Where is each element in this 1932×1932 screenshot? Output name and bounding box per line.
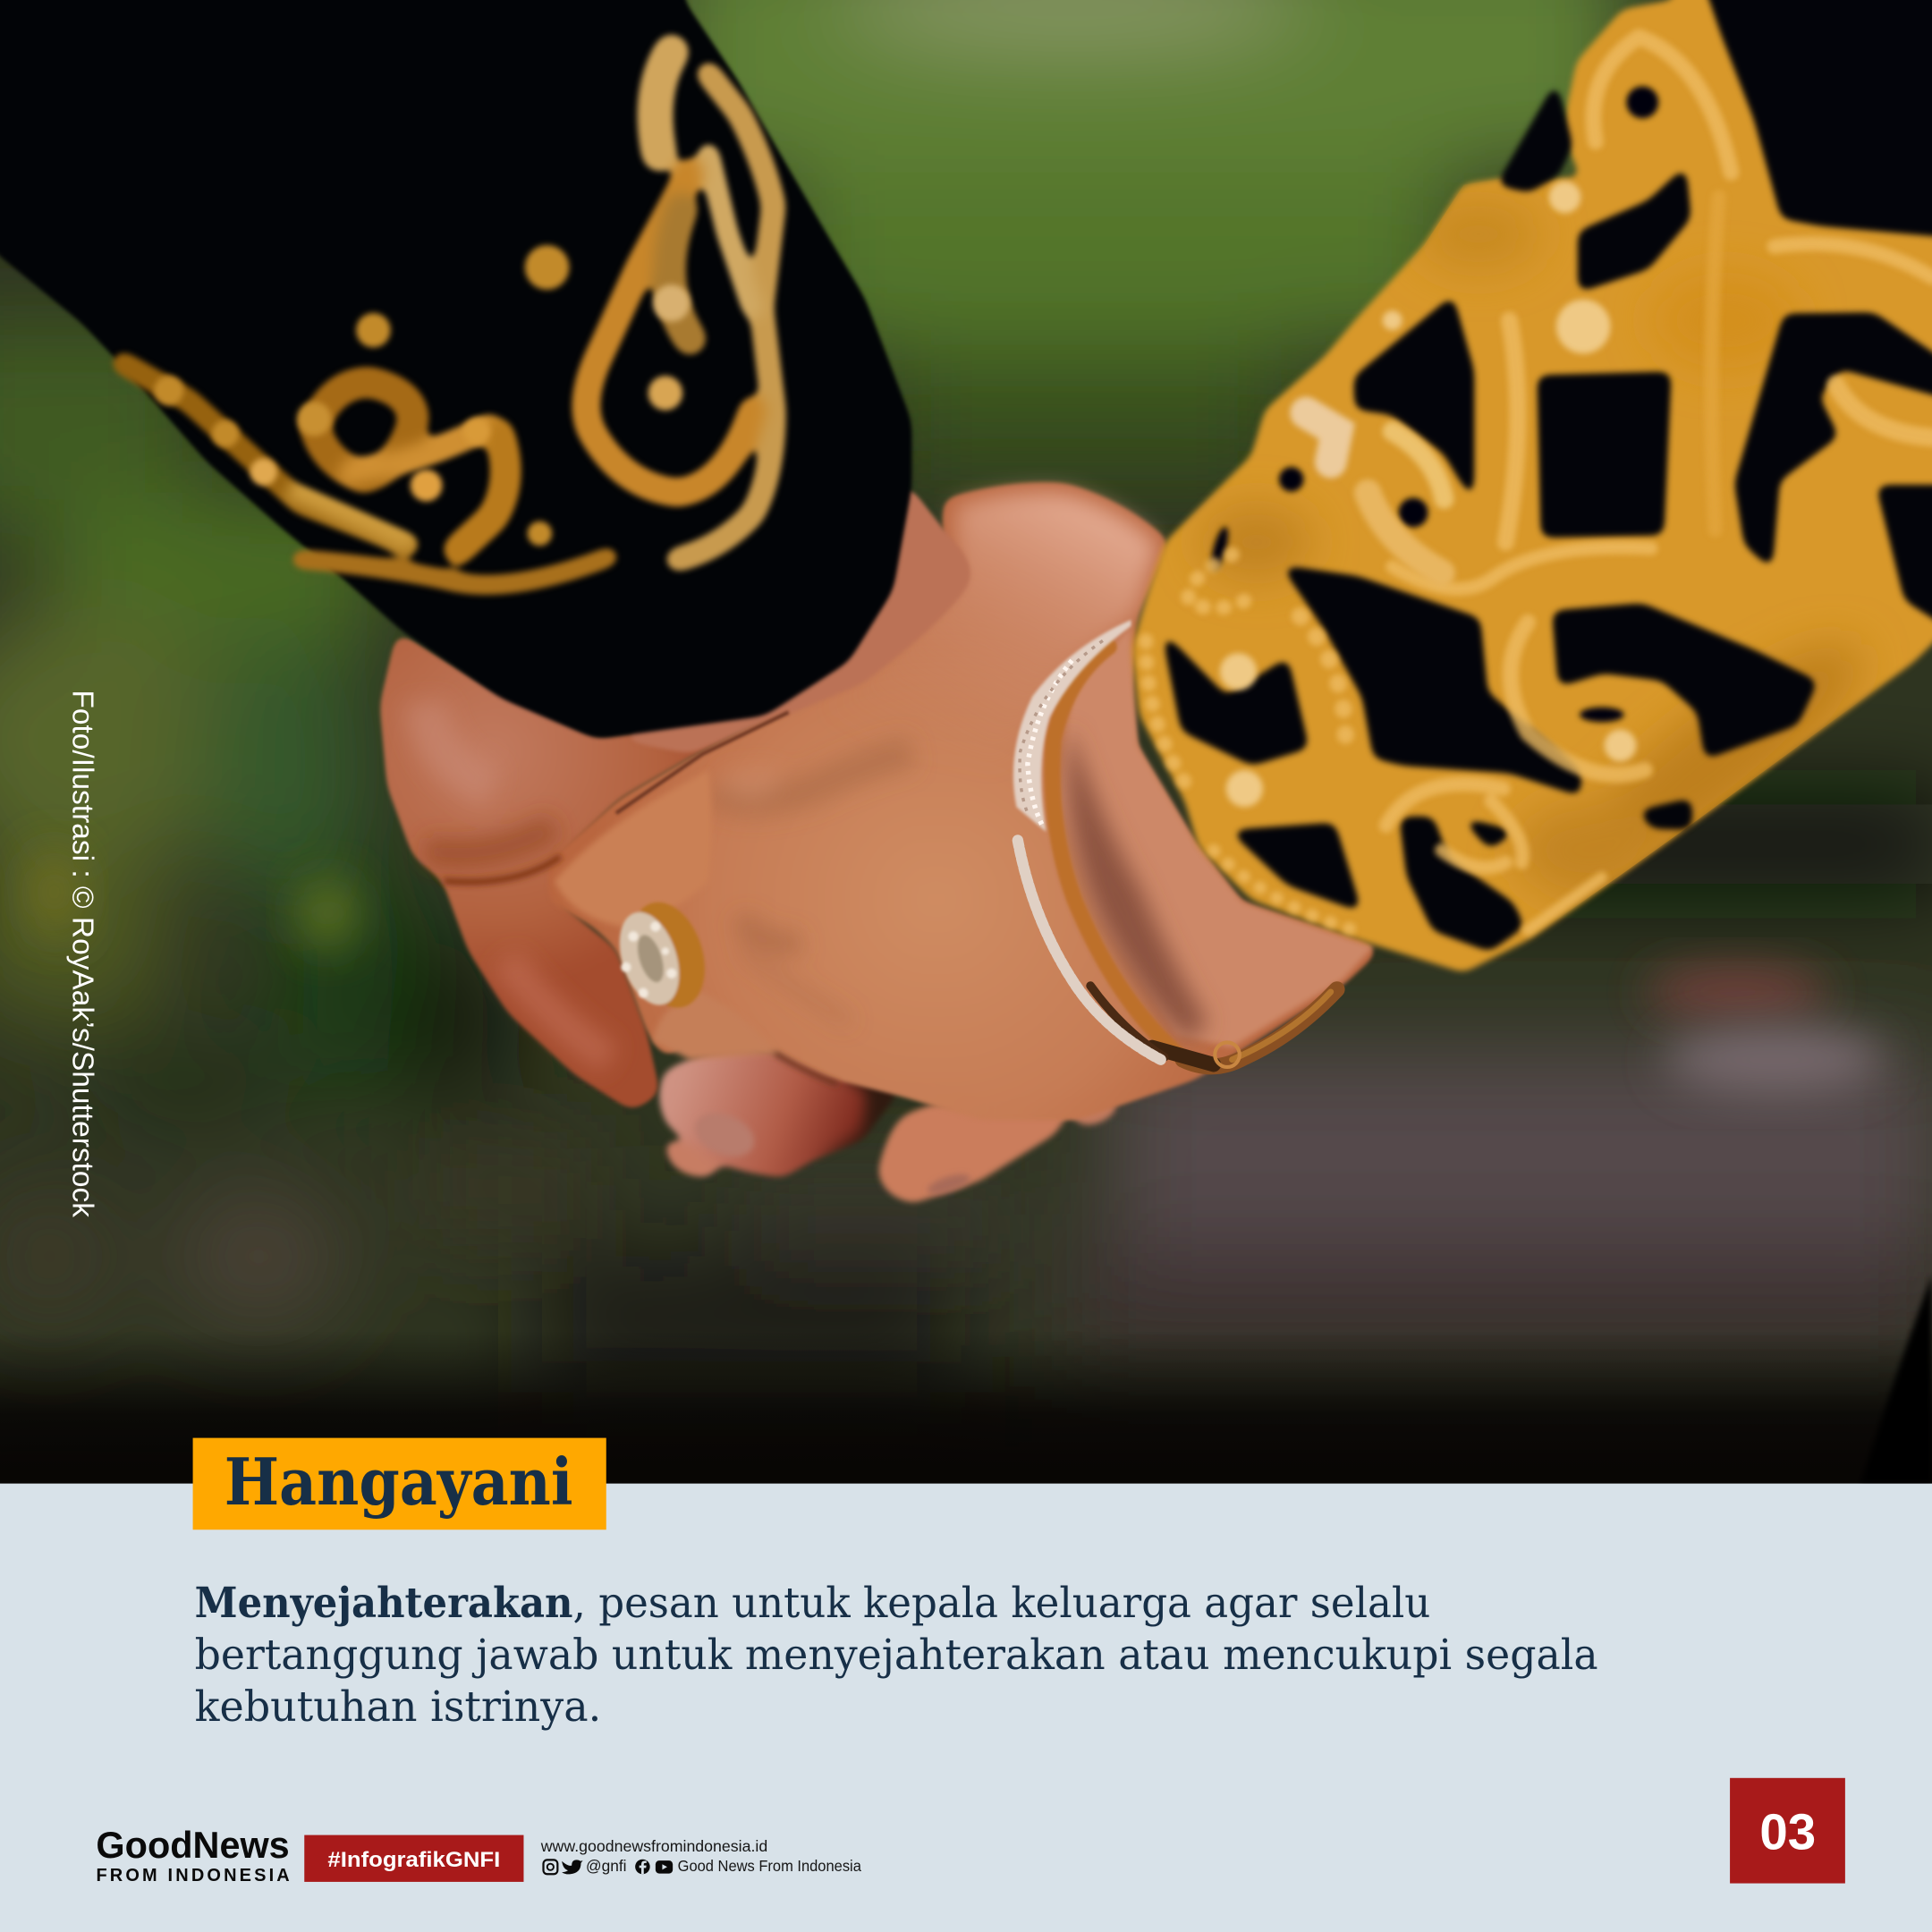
man's hand — [377, 635, 724, 1110]
icon: twitter — [562, 1860, 583, 1874]
photo: holding hands — [0, 0, 1932, 1534]
icon: youtube — [656, 1860, 673, 1874]
bracelet crescent — [1013, 620, 1131, 832]
man's hand shading — [425, 702, 610, 1060]
website and social links: Good News From Indonesia — [678, 1857, 861, 1875]
left sleeve sequins — [154, 245, 690, 546]
man's wrist — [616, 480, 971, 754]
black velvet patches — [1162, 0, 1932, 951]
body text: bertanggung jawab untuk menyejahterakan atau mencukupi segala — [195, 1631, 1598, 1680]
logo: GoodNews from Indonesia — [96, 1825, 290, 1885]
woman's hand pink highlight — [813, 492, 1158, 764]
highlights — [1220, 181, 1636, 807]
body text: , pesan untuk kepala keluarga agar selalu — [573, 1580, 1430, 1628]
woman's hand — [548, 482, 1383, 1120]
page number: 03 — [1759, 1804, 1816, 1860]
wrist shadow beside bracelet — [1067, 727, 1208, 1041]
photo credit: Foto/Ilustrasi : © RoyAak’s/Shutterstock — [65, 690, 98, 1217]
website and social links: @gnfi — [586, 1857, 626, 1875]
fingers below the hand — [660, 1050, 1123, 1202]
beaded gold threads — [1146, 37, 1932, 930]
tonal gold variation — [1201, 197, 1889, 917]
body text — [195, 1579, 1598, 1732]
gold embroidered cuff — [1132, 0, 1932, 972]
hashtag badge — [304, 1835, 523, 1882]
body text: kebutuhan istrinya. — [195, 1683, 601, 1732]
body text: Menyejahterakan — [195, 1579, 573, 1628]
right sleeve — [1132, 0, 1932, 972]
hashtag badge: #InfografikGNFI — [327, 1848, 500, 1872]
page number — [1730, 1778, 1845, 1884]
fingernails — [696, 1114, 970, 1197]
website and social links: www.goodnewsfromindonesia.id — [540, 1837, 767, 1855]
small holes in the embroidery — [1208, 86, 1658, 722]
heading: Hangayani: Hangayani — [225, 1445, 573, 1520]
wrist skin beyond bracelet — [1060, 626, 1374, 1047]
bracelet — [1018, 647, 1337, 1067]
logo: GoodNews from Indonesia: GoodNews — [96, 1825, 290, 1866]
photo background: blurred garden — [0, 0, 1932, 1534]
left sleeve — [0, 0, 911, 740]
icon: facebook — [635, 1860, 650, 1874]
left sleeve embroidery — [123, 52, 774, 585]
ring — [609, 893, 717, 1017]
website and social links — [540, 1837, 861, 1875]
icon: instagram — [544, 1860, 557, 1874]
logo: GoodNews from Indonesia: FROM INDONESIA — [96, 1866, 290, 1885]
knuckle shadows — [715, 751, 911, 1022]
